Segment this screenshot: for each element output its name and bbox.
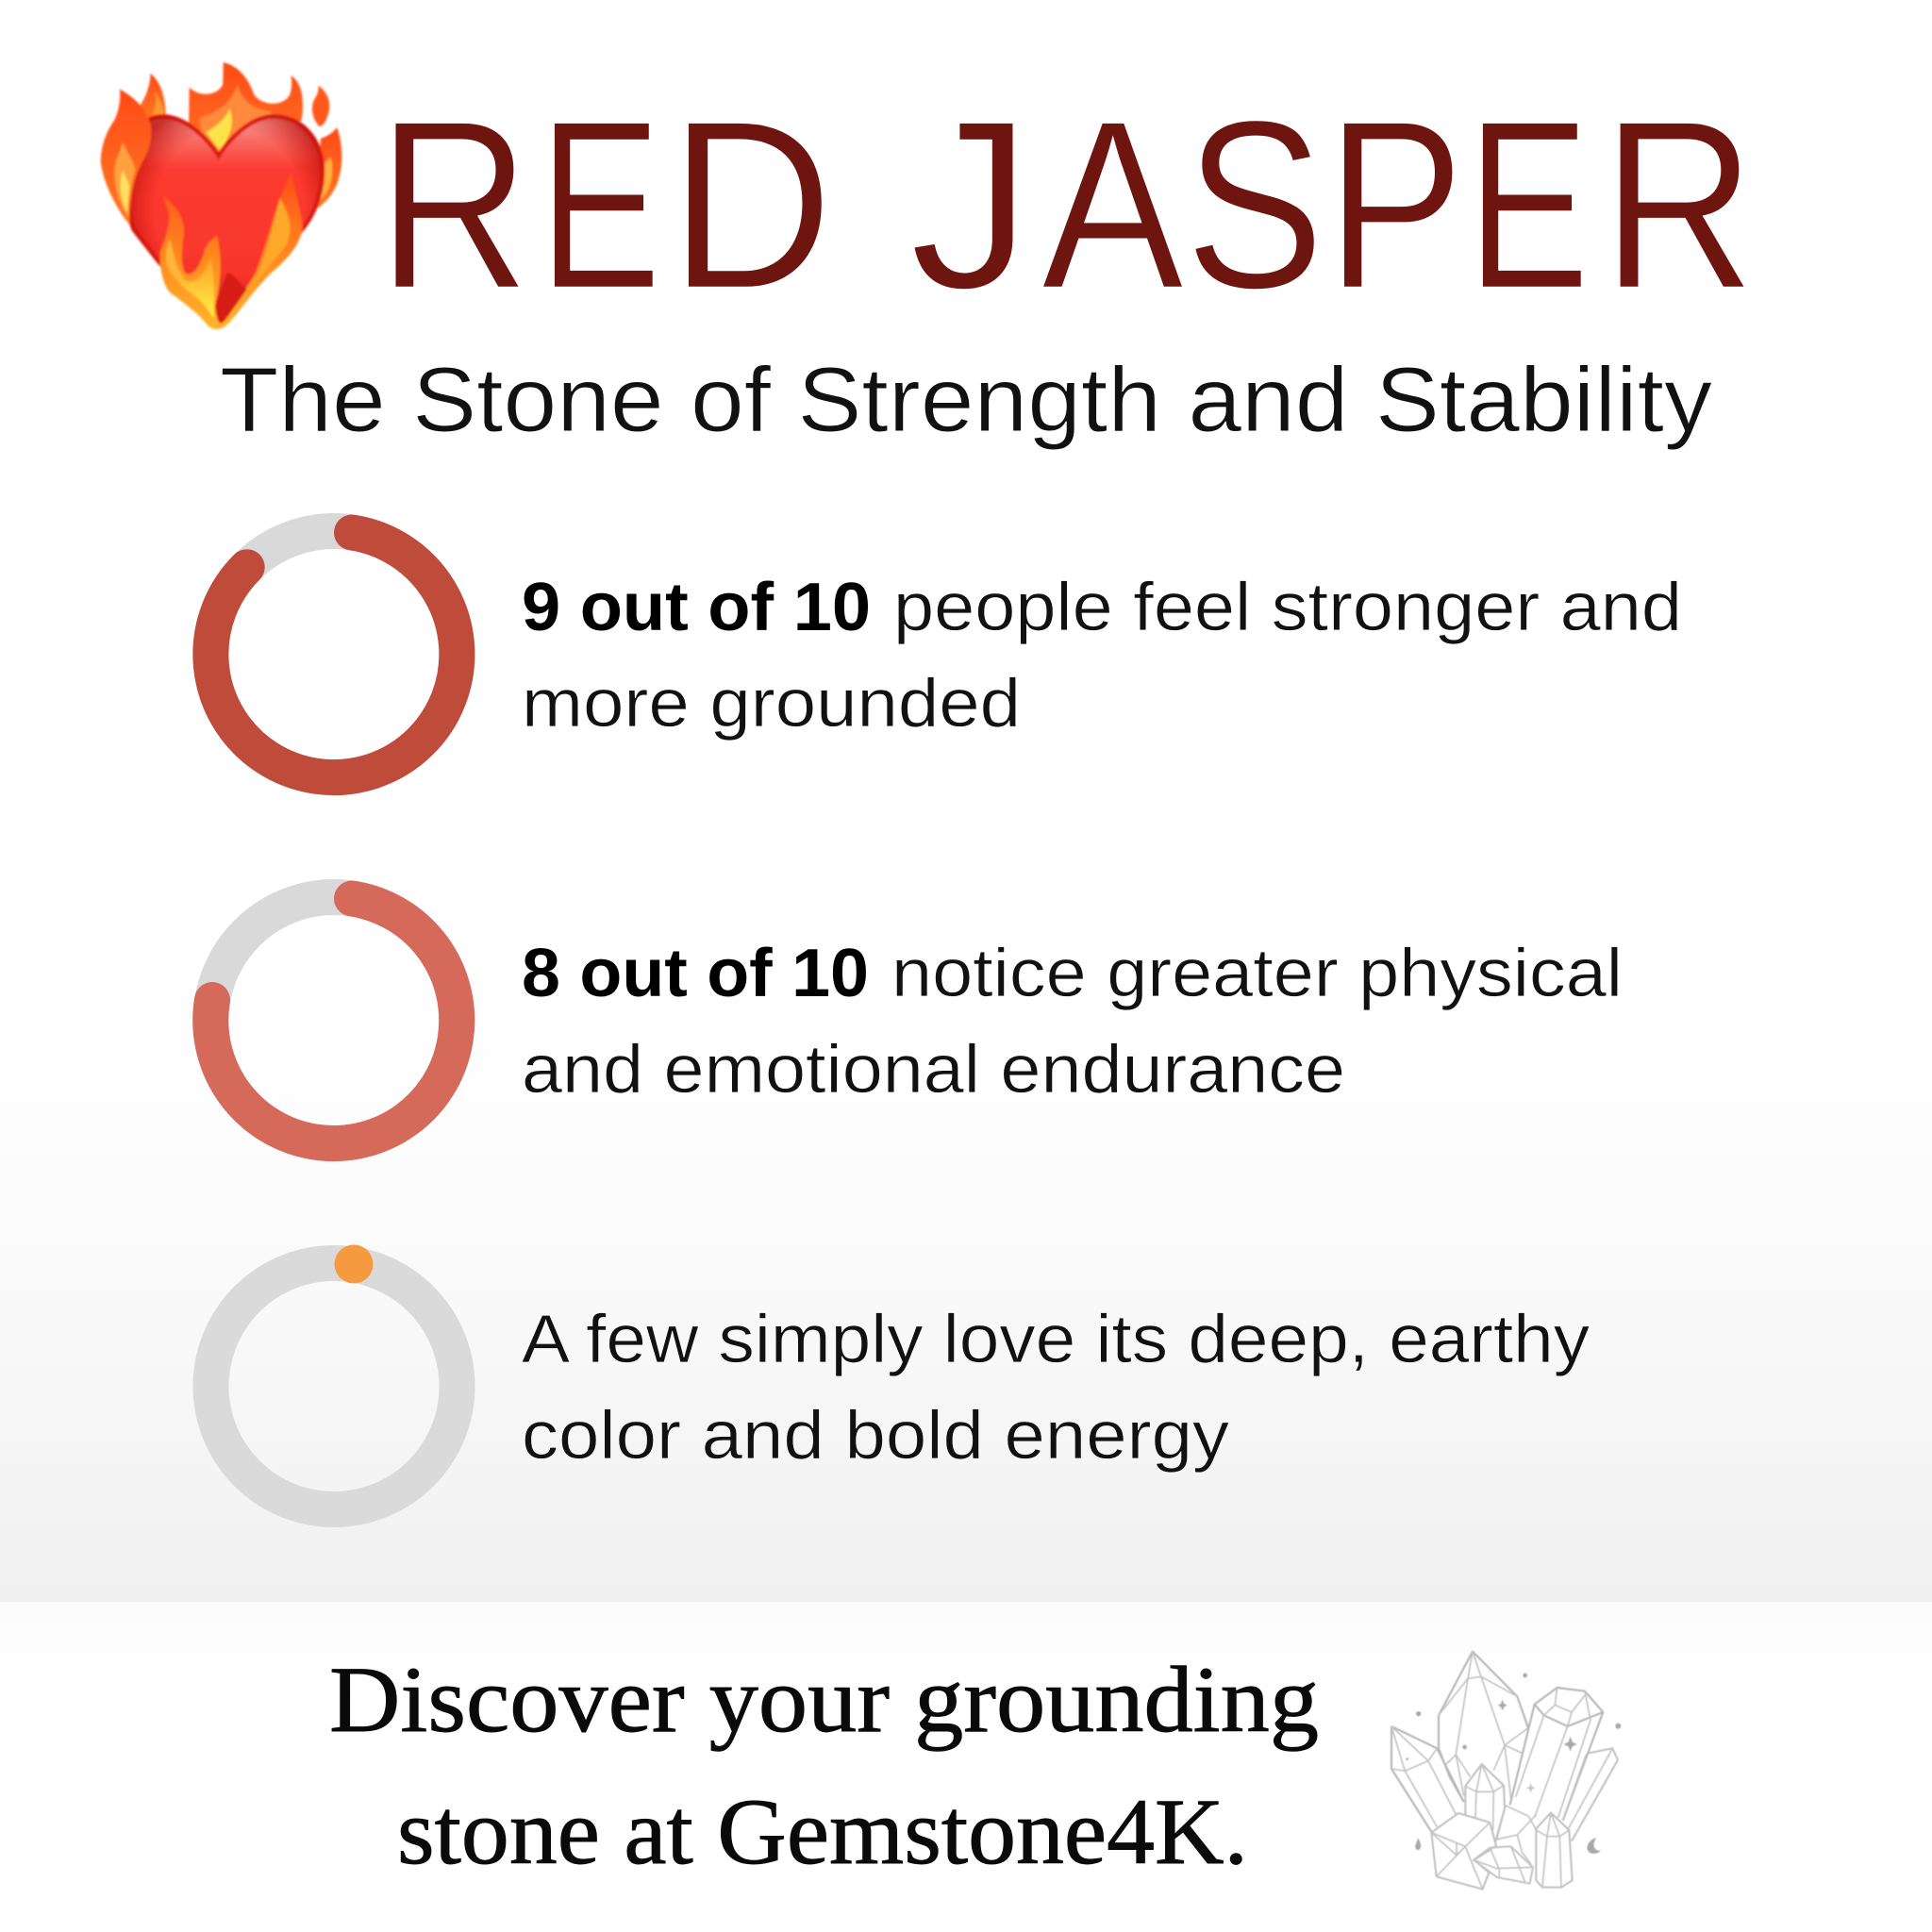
title: R — [1602, 71, 1756, 340]
stat text: 9 out of 10: 9 out of 10 — [522, 570, 871, 645]
title: E — [539, 71, 661, 340]
donut chart: 8 out of 10 — [210, 897, 457, 1143]
stat text: 9 out of 10: more grounded — [522, 666, 1021, 741]
title: S — [1185, 71, 1324, 340]
background upper section — [0, 943, 1932, 1602]
footer call to action — [329, 1647, 1319, 1884]
stat text: a few: color and bold energy — [522, 1398, 1229, 1474]
stat text: a few: A few simply love its deep, earthy — [522, 1302, 1590, 1377]
icon: crystal cluster — [1391, 1652, 1621, 1890]
donut chart: 9 out of 10 — [210, 531, 457, 777]
background footer section — [0, 1602, 1932, 1706]
stat text: 8 out of 10: notice greater physical — [891, 936, 1623, 1011]
stat text: 9 out of 10: people feel stronger and — [893, 570, 1682, 645]
stat text: 8 out of 10: and emotional endurance — [522, 1032, 1345, 1108]
title: E — [1467, 71, 1590, 340]
donut chart: a few — [211, 1245, 457, 1509]
stat text: 8 out of 10: 8 out of 10 — [522, 936, 869, 1011]
title: D — [669, 71, 834, 340]
stat text: a few — [522, 1302, 1590, 1474]
title: A — [1041, 71, 1184, 340]
title: P — [1326, 71, 1464, 340]
title: R — [377, 71, 530, 340]
footer call to action: stone at Gemstone4K. — [397, 1779, 1248, 1884]
stat text: 9 out of 10 — [522, 570, 1682, 741]
title: J — [909, 71, 1032, 340]
stat text: 8 out of 10 — [522, 936, 1623, 1108]
icon: heart on fire — [101, 62, 341, 329]
subtitle: The Stone of Strength and Stability — [220, 348, 1713, 451]
footer call to action: Discover your grounding — [329, 1647, 1319, 1752]
